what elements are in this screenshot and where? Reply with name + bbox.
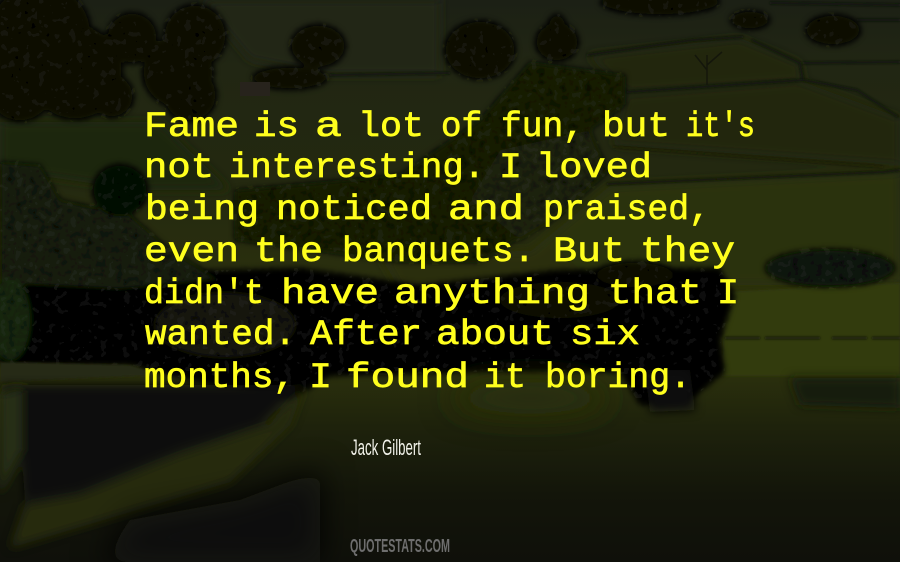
lake reflections — [0, 370, 900, 548]
line 1: fun, — [501, 107, 584, 147]
line 4: the — [254, 232, 323, 272]
line 2: loved — [536, 148, 652, 188]
upper-right trees — [444, 0, 861, 80]
sloping fields — [0, 0, 900, 290]
line 5: that — [608, 274, 702, 314]
line 3: noticed — [276, 190, 432, 230]
line 2: interesting. — [229, 148, 485, 188]
line 1 — [144, 107, 755, 147]
line 5: anything — [394, 274, 590, 314]
quote text — [144, 107, 755, 398]
line 3 — [145, 190, 710, 230]
line 4 — [144, 232, 735, 272]
line 4: they — [640, 232, 735, 272]
lakeside dark woods — [0, 268, 735, 405]
right meadow and shoreline — [722, 283, 900, 376]
line 4: even — [144, 232, 239, 272]
wooded slopes — [0, 62, 895, 362]
line 3: and — [448, 190, 524, 230]
line 1: is — [254, 107, 299, 147]
line 3: being — [145, 190, 259, 230]
line 5: didn't — [144, 274, 264, 314]
shore strip left — [0, 362, 160, 382]
watermark: QUOTESTATS.COM — [350, 536, 450, 556]
line 1: but — [602, 107, 670, 147]
line 7: found — [346, 358, 469, 398]
line 6 — [145, 315, 640, 355]
top-left dark trees — [0, 0, 346, 122]
line 2: I — [499, 148, 522, 188]
line 7: boring. — [545, 358, 691, 398]
line 1: Fame — [144, 107, 239, 147]
line 6: wanted. — [145, 315, 296, 355]
line 2 — [144, 148, 652, 188]
line 7: it — [484, 358, 526, 398]
farmhouse — [240, 82, 270, 96]
line 5: I — [717, 274, 739, 314]
line 4: banquets. — [342, 232, 535, 272]
line 7: I — [309, 358, 332, 398]
line 1: lot — [358, 107, 424, 147]
line 6: After — [310, 315, 422, 355]
line 6: about — [436, 315, 554, 355]
line 7: months, — [144, 358, 295, 398]
line 1: of — [441, 107, 482, 147]
line 2: not — [144, 148, 214, 188]
bare tree — [695, 52, 722, 85]
line 5 — [144, 274, 739, 314]
line 3: praised, — [543, 190, 710, 230]
field walls — [330, 3, 900, 338]
line 4: But — [553, 232, 625, 272]
line 7 — [144, 358, 691, 398]
author: Jack Gilbert — [351, 435, 421, 460]
line 1: a — [315, 107, 342, 147]
line 1: it's — [686, 107, 755, 147]
line 5: have — [281, 274, 379, 314]
line 6: six — [570, 315, 640, 355]
